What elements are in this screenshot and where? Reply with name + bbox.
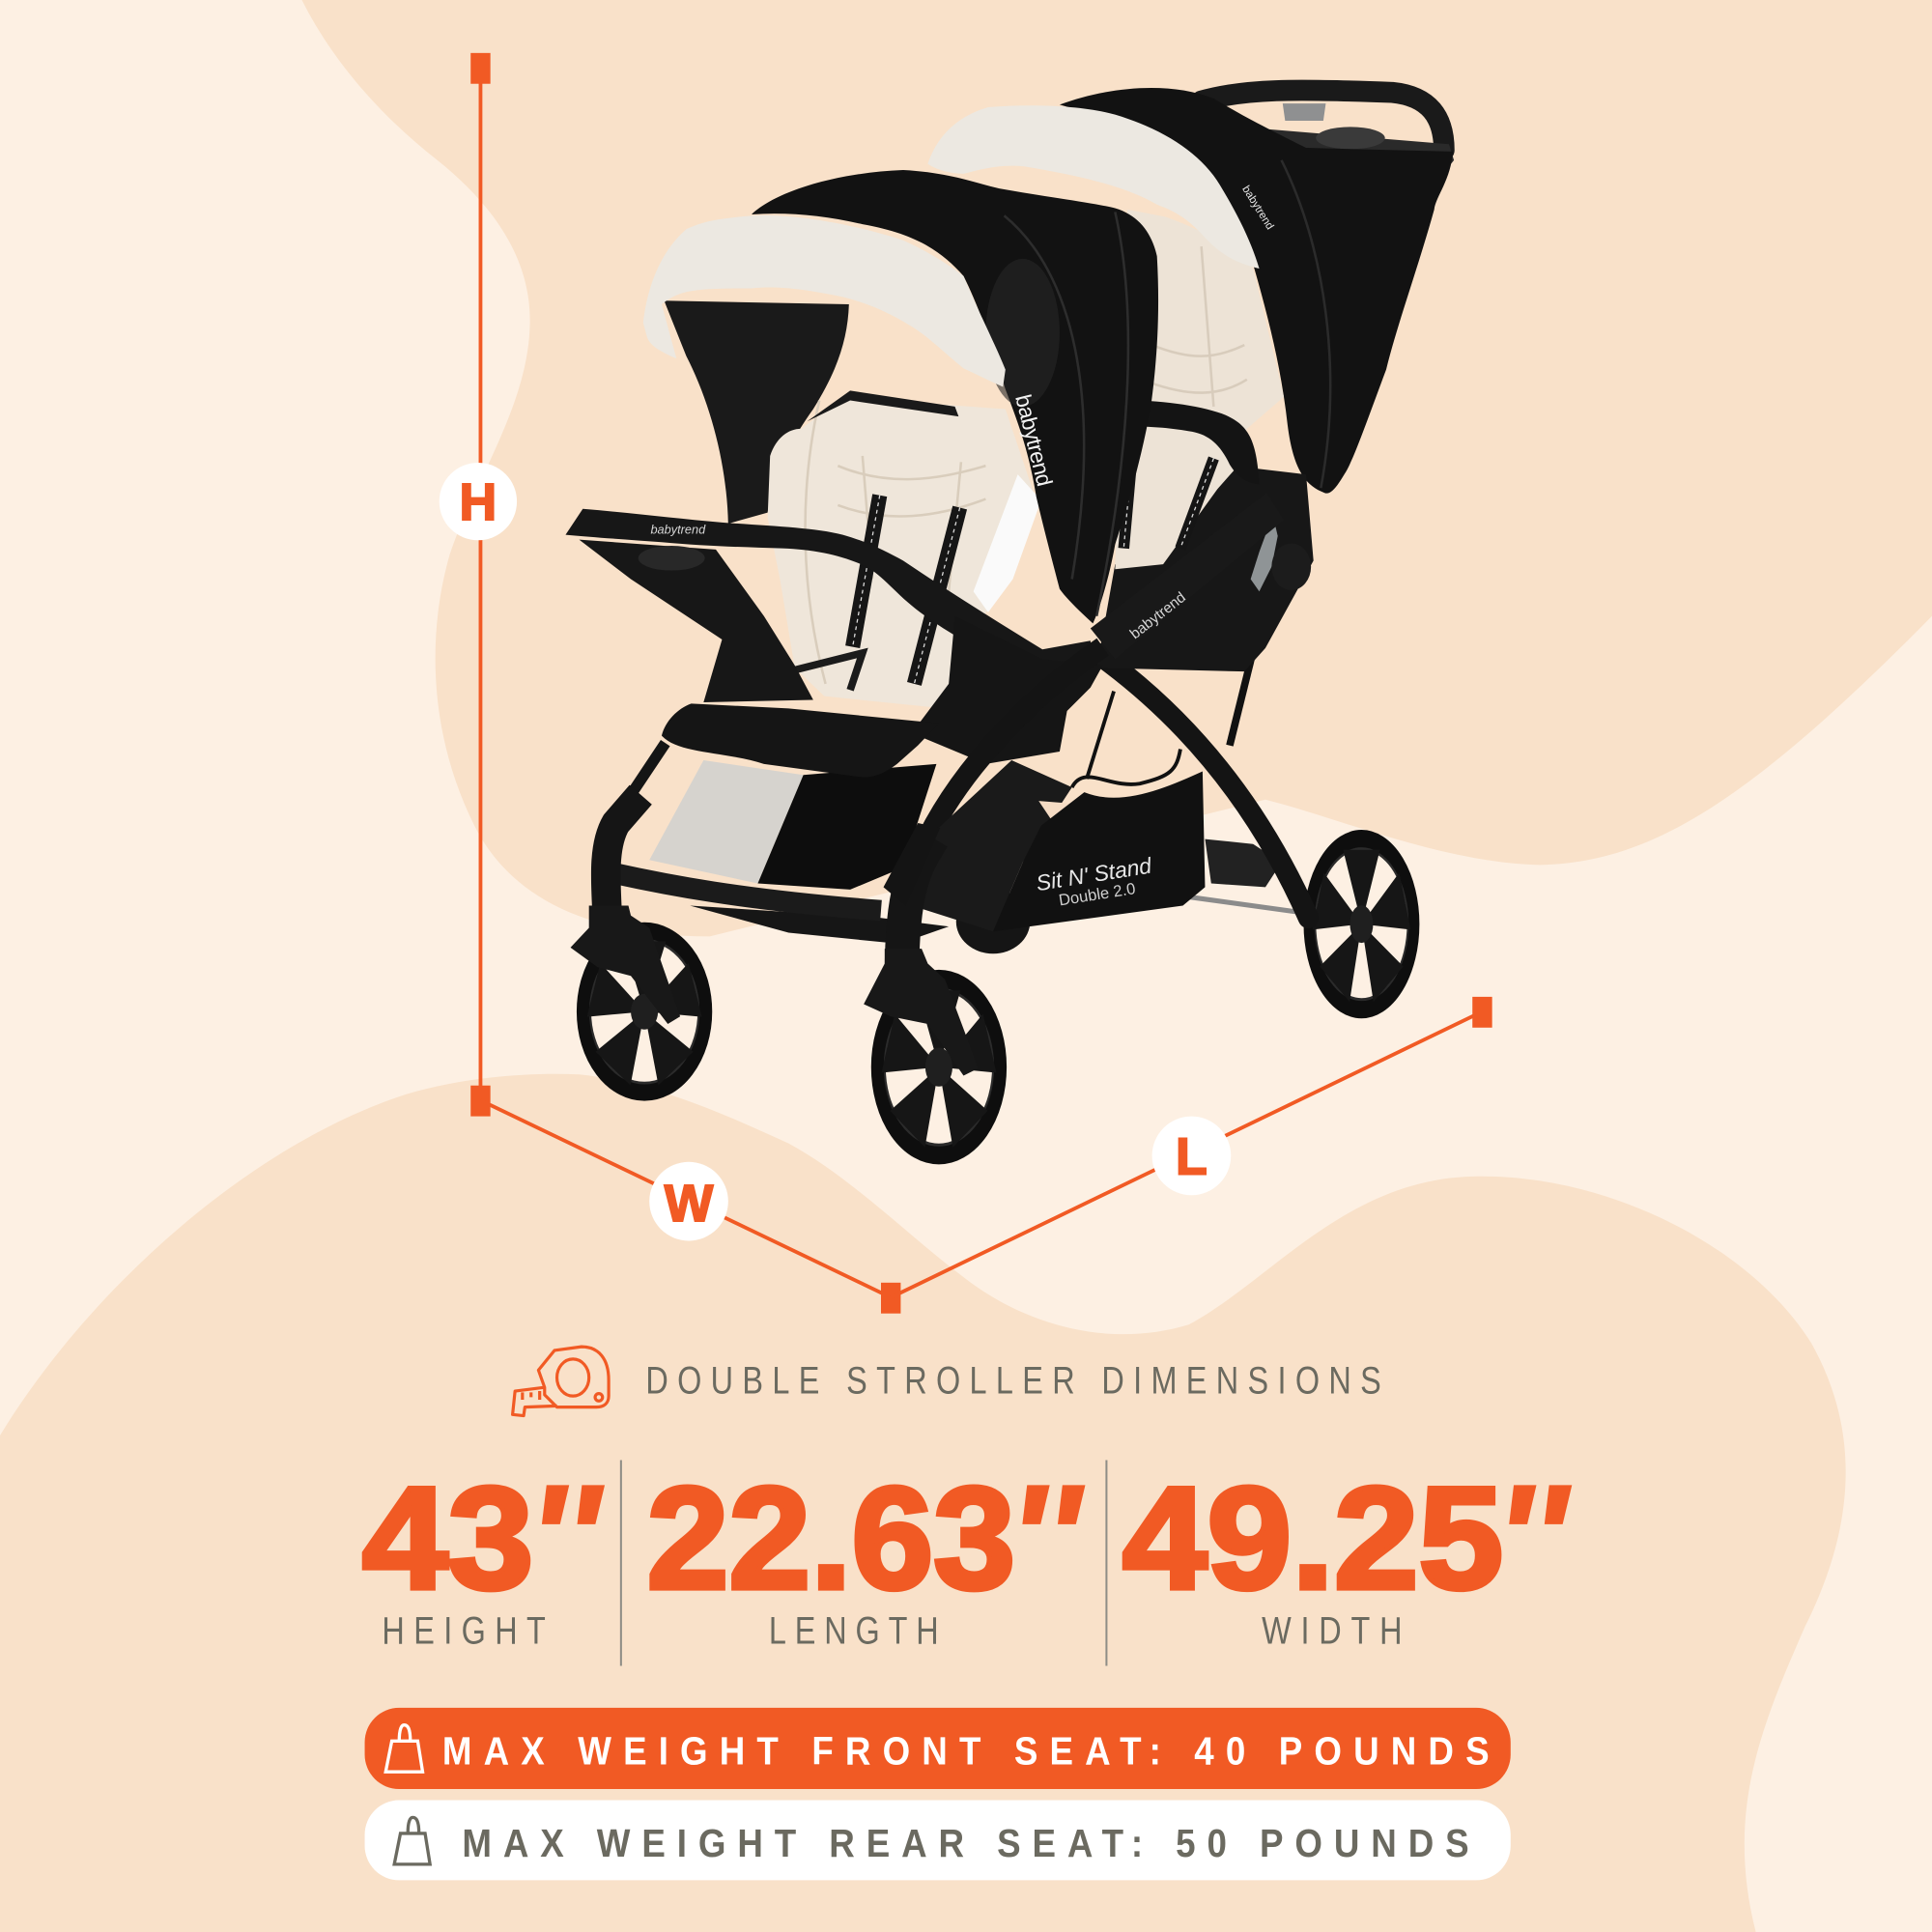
- pill: front seat: [365, 1708, 1511, 1789]
- stat: height: [362, 1452, 622, 1652]
- rear seat text: MAX WEIGHT REAR SEAT: 50 POUNDS: [462, 1822, 1469, 1866]
- width line: [480, 1100, 900, 1314]
- number 49.25: 49.25: [1122, 1457, 1503, 1619]
- front seat text: MAX WEIGHT FRONT SEAT: 40 POUNDS: [442, 1730, 1490, 1774]
- badge L: [1152, 1117, 1231, 1195]
- front safety bar: [565, 509, 1094, 680]
- front cup holder: [639, 546, 705, 571]
- main curved frame: [922, 647, 1103, 850]
- thin strut: [1087, 692, 1114, 779]
- icon: weight grey: [394, 1817, 430, 1864]
- dimension lines: [440, 53, 1492, 1314]
- divider two: [1105, 1460, 1107, 1665]
- stat: width: [1122, 1452, 1589, 1652]
- front top strap edge: [807, 390, 958, 421]
- heading text: DOUBLE STROLLER DIMENSIONS: [645, 1359, 1381, 1402]
- basket: Sit N' Stand: [1035, 852, 1154, 895]
- front right wheel: [878, 980, 1000, 1154]
- label height: HEIGHT: [382, 1608, 546, 1652]
- black side panel: [757, 764, 936, 890]
- inch mark: ": [510, 1452, 622, 1627]
- under-bar tray and bag: [579, 540, 813, 702]
- front safety bar: babytrend: [650, 522, 706, 536]
- rear frame leg: [1096, 653, 1309, 918]
- handlebar: [1202, 90, 1444, 151]
- rear seat pad: [1115, 210, 1284, 564]
- badge W: W: [665, 1176, 714, 1233]
- front left wheel: [583, 931, 705, 1092]
- background blob: bottom: [0, 1074, 1846, 1932]
- height line: [470, 53, 491, 1117]
- badge H: [440, 463, 517, 540]
- front seat pad: [768, 394, 1041, 707]
- icon: tape measure: [513, 1347, 609, 1416]
- handle grip latch: [1283, 103, 1325, 121]
- badge L: L: [1176, 1129, 1208, 1186]
- background blob: top: [301, 0, 1932, 936]
- rear safety bar: [1130, 401, 1260, 484]
- icon: weight white: [385, 1725, 423, 1772]
- label width: WIDTH: [1262, 1608, 1403, 1652]
- divider one: [620, 1460, 622, 1665]
- number 22.63: 22.63: [647, 1457, 1015, 1619]
- rear right wheel: [1309, 839, 1413, 1009]
- mesh side panel: [649, 760, 804, 884]
- frame brand label: babytrend: [1127, 589, 1189, 642]
- stroller illustration: [565, 88, 1454, 1154]
- basket: [912, 750, 1205, 931]
- heading: [513, 1347, 1381, 1416]
- front canopy brim: [643, 215, 1006, 387]
- central frame tube: [1091, 493, 1284, 659]
- rear seat lower dark: [1096, 466, 1314, 671]
- rear harness straps: [1123, 425, 1213, 549]
- inch mark: ": [991, 1452, 1102, 1627]
- under seat mass: [690, 906, 949, 944]
- central dark body: [912, 616, 1103, 764]
- basket: Double 2.0: [1058, 879, 1137, 909]
- front footbar and legs: [606, 743, 940, 974]
- label length: LENGTH: [769, 1608, 939, 1652]
- rear canopy: [1060, 88, 1453, 494]
- number 43: 43: [362, 1457, 533, 1619]
- front harness: [788, 496, 960, 690]
- stat: length: [647, 1452, 1102, 1652]
- parent tray: [1269, 129, 1454, 222]
- front canopy: [752, 170, 1158, 623]
- badge W: [649, 1162, 728, 1240]
- rear canopy brim: [927, 105, 1260, 269]
- canopy brand label: babytrend: [1010, 392, 1058, 489]
- rear pad lower cream: [1115, 426, 1236, 569]
- front right fork: [864, 949, 979, 1076]
- rear wheel small: [956, 890, 1030, 953]
- cup holder: [1316, 127, 1385, 149]
- footrest: [662, 703, 939, 777]
- rear strut: [1230, 616, 1262, 746]
- badge H: H: [460, 474, 497, 531]
- hinge disc: [1271, 543, 1311, 590]
- adjuster latch: [1251, 515, 1278, 591]
- platform and axle: [1180, 839, 1296, 912]
- front left fork: [571, 906, 680, 1024]
- pill: rear seat: [365, 1801, 1511, 1880]
- front canopy curtain: [665, 300, 849, 524]
- rear canopy brand label: babytrend: [1239, 184, 1275, 232]
- inch mark: ": [1477, 1452, 1589, 1627]
- length line: [891, 997, 1492, 1297]
